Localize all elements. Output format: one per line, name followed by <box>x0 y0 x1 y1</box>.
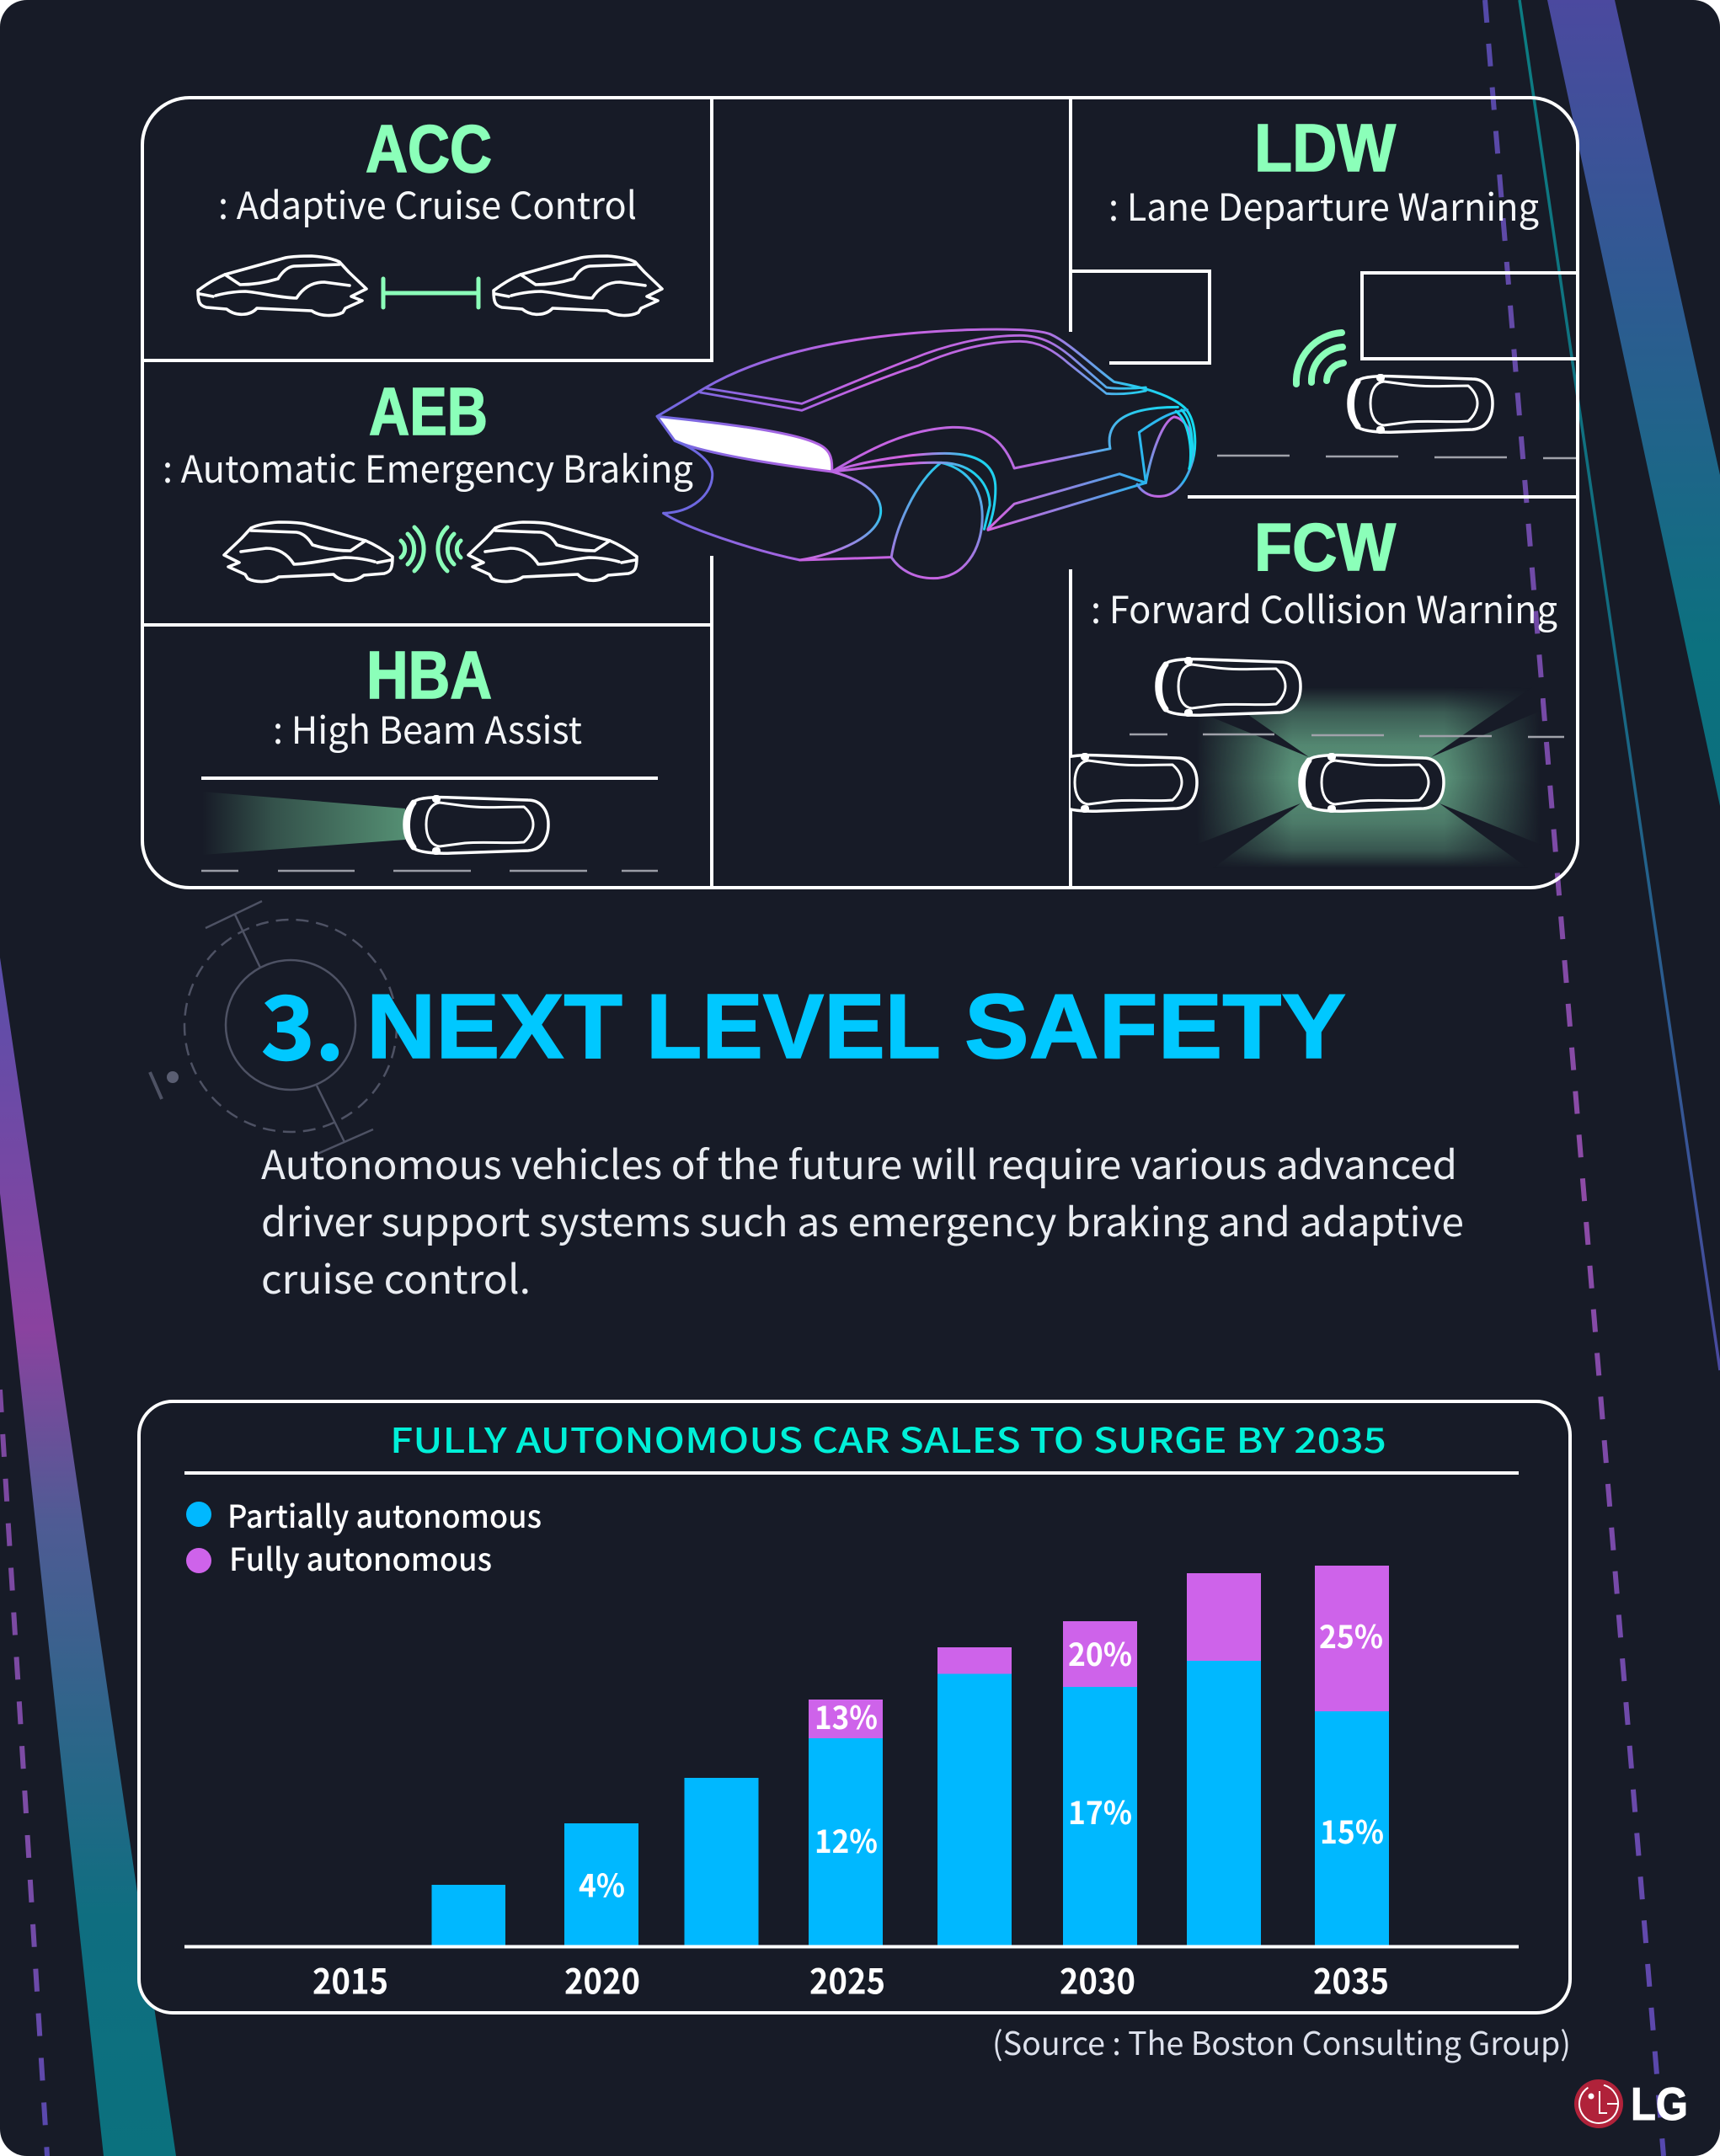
body paragraph: Autonomous vehicles of the future will require various advanced <box>261 1133 1457 1191</box>
FCW heading: FCW <box>1254 510 1396 584</box>
bar value labels: 17% <box>1068 1787 1132 1833</box>
year axis labels: 2035 <box>1313 1954 1389 2004</box>
FCW block <box>1053 510 1564 868</box>
icon: car in adjacent lane <box>1156 657 1301 717</box>
ACC heading: ACC <box>366 111 492 186</box>
bar value labels: 12% <box>815 1816 878 1862</box>
ACC block <box>198 111 662 316</box>
chart title: FULLY AUTONOMOUS CAR SALES TO SURGE BY 2035 <box>390 1412 1386 1463</box>
legend: Partially autonomous <box>227 1492 542 1537</box>
legend <box>186 1492 542 1580</box>
year axis labels: 2015 <box>312 1954 388 2004</box>
section title: SAFETY <box>964 975 1346 1078</box>
AEB description: : Automatic Emergency Braking <box>163 439 693 494</box>
year axis labels: 2020 <box>564 1954 640 2004</box>
icon: host car <box>1300 753 1444 813</box>
icon: car from above <box>404 795 548 855</box>
bar value labels: 25% <box>1319 1611 1383 1657</box>
central neon car <box>657 329 1195 579</box>
LG logo: LG <box>1631 2078 1688 2130</box>
icon: car ahead <box>468 522 637 582</box>
bar value labels <box>579 1611 1384 1907</box>
section emblem <box>150 901 397 1154</box>
panel: driver assistance systems <box>142 98 1578 888</box>
bar value labels: 4% <box>579 1860 625 1907</box>
section title: NEXT <box>366 975 622 1078</box>
year axis labels <box>312 1954 1389 2004</box>
source note: (Source : The Boston Consulting Group) <box>992 2018 1571 2064</box>
body paragraph <box>261 1133 1464 1305</box>
ACC description: : Adaptive Cruise Control <box>218 175 637 230</box>
stacked bar chart <box>184 1566 1519 2004</box>
section title: LEVEL <box>646 975 941 1078</box>
body paragraph: cruise control. <box>261 1247 531 1305</box>
icon: following car <box>198 256 366 316</box>
HBA block <box>201 638 658 871</box>
icon: signal waves <box>401 527 461 571</box>
HBA description: : High Beam Assist <box>273 700 582 755</box>
icon: sensor glow <box>1196 687 1541 868</box>
LG logo <box>1574 2078 1688 2130</box>
LDW heading: LDW <box>1254 110 1396 185</box>
icon: distance marker <box>383 279 478 307</box>
section heading <box>261 958 1346 1085</box>
AEB block <box>163 374 693 582</box>
LDW description: : Lane Departure Warning <box>1108 177 1539 232</box>
bar value labels: 13% <box>815 1692 878 1738</box>
HBA heading: HBA <box>366 638 492 712</box>
icon: warning waves <box>1296 333 1343 384</box>
icon: braking car <box>224 522 393 582</box>
body paragraph: driver support systems such as emergency braking and adaptive <box>261 1190 1464 1248</box>
bar value labels: 20% <box>1068 1629 1132 1675</box>
section number: 3. <box>261 958 345 1085</box>
bar value labels: 15% <box>1320 1806 1384 1853</box>
legend: Fully autonomous <box>229 1534 492 1580</box>
AEB heading: AEB <box>369 374 488 449</box>
section title <box>366 975 1346 1078</box>
year axis labels: 2030 <box>1060 1954 1135 2004</box>
LDW block <box>1108 110 1576 458</box>
panel: sales chart <box>139 1401 1570 2013</box>
icon: leading car <box>494 256 662 316</box>
FCW description: : Forward Collision Warning <box>1091 579 1557 634</box>
icon: car in rear <box>1071 753 1199 813</box>
panel frame and dividers <box>142 98 1578 888</box>
year axis labels: 2025 <box>809 1954 885 2004</box>
icon: car drifting from lane <box>1349 374 1493 434</box>
icon: light beam <box>202 792 405 855</box>
